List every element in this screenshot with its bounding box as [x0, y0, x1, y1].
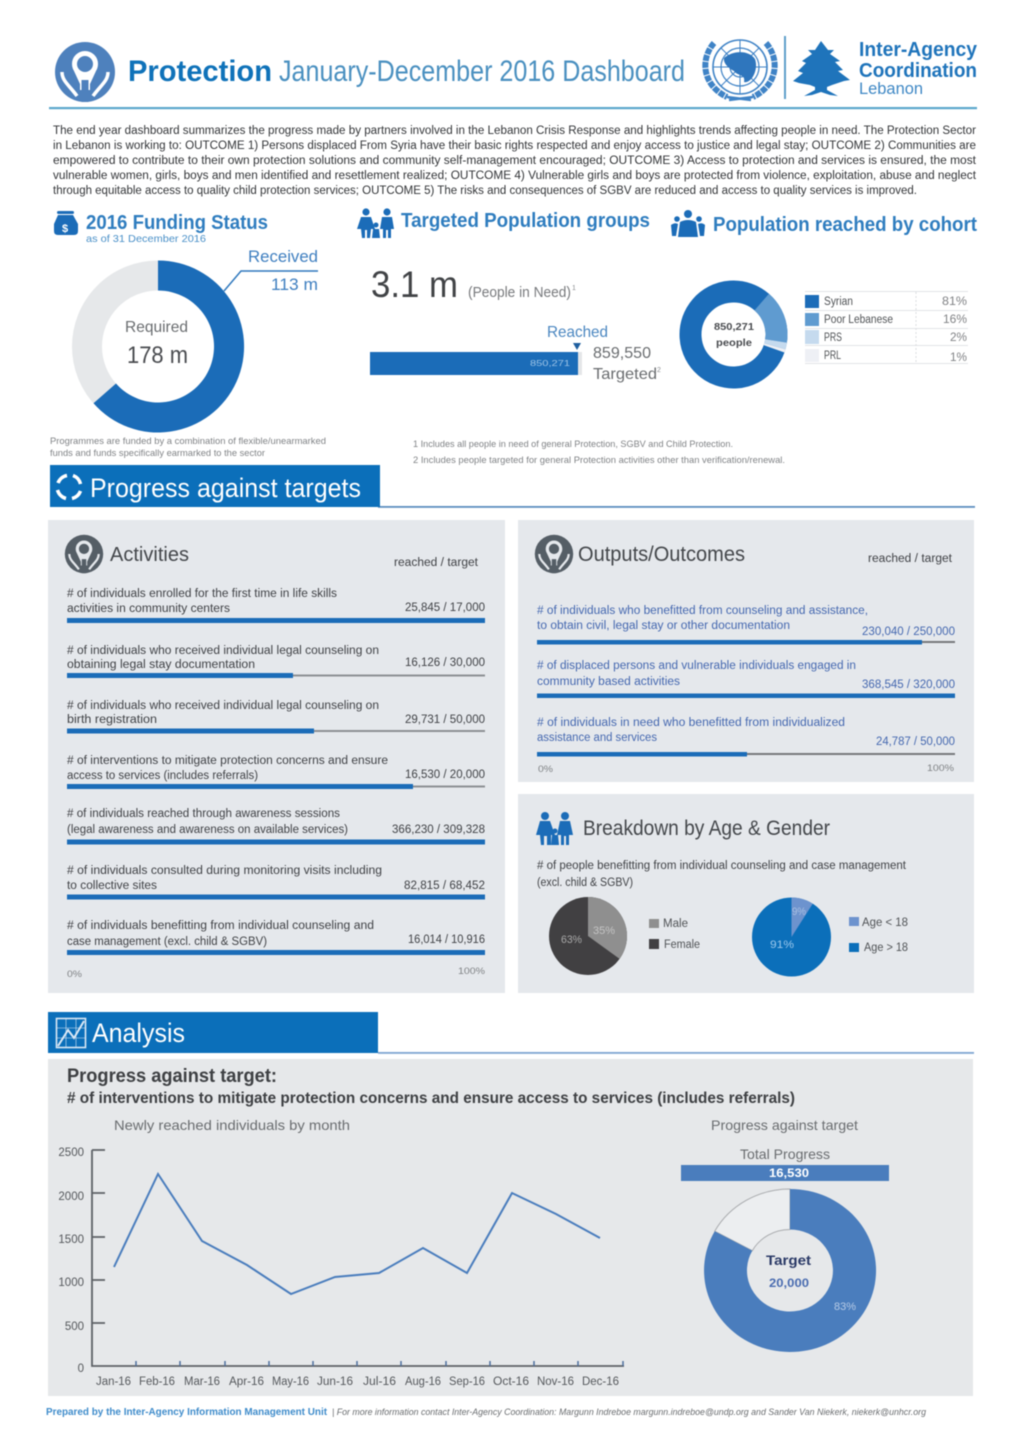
icon: family	[357, 208, 394, 238]
icon: UN emblem	[705, 40, 775, 100]
outcome row 1: to obtain civil, legal stay or other documentation	[537, 620, 790, 632]
donut centre label: 850,271	[714, 322, 754, 333]
activity row 3	[67, 700, 485, 734]
scale labels	[538, 763, 955, 775]
legend: age: Age > 18	[864, 942, 908, 954]
activity row 6: 82,815 / 68,452	[404, 880, 485, 892]
activity row 5	[67, 808, 485, 844]
line chart: newly reached individuals by month: Newly reached individuals by month	[114, 1117, 350, 1133]
line chart: newly reached individuals by month: 500	[65, 1321, 84, 1333]
activity row 1	[67, 588, 485, 623]
scale labels: 100%	[458, 966, 486, 977]
outcome row 2: 368,545 / 320,000	[862, 679, 955, 691]
outcome row 1: # of individuals who benefitted from counseling and assistance,	[537, 605, 868, 617]
divider	[784, 36, 786, 99]
bar: reached vs targeted	[370, 324, 661, 383]
outcome row 2	[537, 660, 955, 698]
activity row 2: 16,126 / 30,000	[405, 657, 485, 669]
donut centre label	[714, 322, 754, 349]
logo text: Inter-Agency Coordination Lebanon: Coordination	[859, 60, 977, 82]
heading: progress against target: Progress against target:	[67, 1066, 277, 1087]
donut chart: funding: Required	[125, 319, 188, 336]
funding note	[50, 436, 326, 459]
line chart: newly reached individuals by month: May-16	[272, 1376, 309, 1388]
panel: analysis chart area	[48, 1059, 973, 1396]
scale labels: 100%	[927, 763, 955, 774]
outcome row 3: # of individuals in need who benefitted from individualized	[537, 717, 845, 729]
column label: reached / target	[394, 557, 479, 569]
heading: outputs/outcomes: Outputs/Outcomes	[578, 543, 745, 566]
section banner: analysis: Analysis	[92, 1018, 185, 1048]
chart: total progress donut: 20,000	[769, 1276, 809, 1290]
legend: age: Age < 18	[862, 917, 908, 929]
activity row 3: # of individuals who received individual legal counseling on	[67, 700, 379, 712]
icon: chart	[56, 1018, 86, 1048]
heading: activities: Activities	[110, 544, 189, 566]
header	[55, 36, 978, 102]
logo text: Inter-Agency Coordination Lebanon: Inter-Agency	[859, 39, 978, 61]
heading: targeted population groups: Targeted Population groups	[401, 210, 650, 232]
activity row 2: obtaining legal stay documentation	[67, 659, 255, 671]
panel: targeted population groups	[357, 208, 785, 466]
funding note: Programmes are funded by a combination of flexible/unearmarked	[50, 436, 326, 447]
activity row 1: 25,845 / 17,000	[405, 602, 485, 614]
line chart: newly reached individuals by month: 1500	[58, 1234, 84, 1246]
logo text: Inter-Agency Coordination Lebanon: Lebanon	[859, 79, 923, 98]
activity row 7	[67, 920, 485, 955]
stat: people in need: (People in Need)	[468, 284, 571, 301]
line chart: newly reached individuals by month: 1000	[58, 1277, 84, 1289]
intro paragraph: The end year dashboard summarizes the progress made by partners involved in the Lebanon Crisis Response and highlights trends affecting people in need. The Protection Sector	[53, 125, 976, 137]
chart: total progress donut: 16,530	[769, 1166, 809, 1180]
donut chart: funding: 178 m	[127, 342, 188, 369]
title: January-December 2016 Dashboard	[279, 55, 685, 88]
activity row 6: to collective sites	[67, 880, 157, 892]
footer: Prepared by the Inter-Agency Information Management Unit	[46, 1406, 327, 1418]
stat: people in need: 3.1 m	[371, 264, 458, 305]
heading: progress against target: # of interventions to mitigate protection concerns and ensure access to services (includes referrals)	[67, 1090, 795, 1107]
line chart: newly reached individuals by month: Jul-16	[363, 1376, 396, 1388]
pie chart: age	[752, 898, 831, 976]
activity row 4	[67, 755, 485, 789]
line chart: newly reached individuals by month: Mar-16	[184, 1376, 220, 1388]
chart: total progress donut: Target	[766, 1252, 811, 1268]
panel: outputs/outcomes	[518, 520, 974, 782]
bar: reached vs targeted: 2	[657, 367, 661, 374]
title: Protection	[128, 55, 272, 88]
scale labels: 0%	[67, 969, 83, 980]
activity row 4: access to services (includes referrals)	[67, 770, 258, 782]
column label: reached / target	[868, 553, 953, 565]
legend table: cohort: Poor Lebanese	[824, 314, 893, 326]
subheading: (excl. child & SGBV)	[537, 877, 633, 889]
callout: received: 113 m	[271, 275, 318, 294]
footer	[46, 1406, 926, 1418]
intro paragraph: in Lebanon is working to: OUTCOME 1) Persons displaced From Syria have their basic rights respected and enjoy access to justice and legal stay; OUTCOME 2) Communities are	[53, 140, 976, 152]
legend table: cohort	[805, 292, 968, 364]
donut centre label: people	[716, 338, 752, 349]
line chart: newly reached individuals by month: Aug-16	[405, 1376, 441, 1388]
outcome row 1: 230,040 / 250,000	[862, 626, 955, 638]
outcome row 2: community based activities	[537, 676, 680, 688]
bar: reached vs targeted: Reached	[547, 324, 608, 341]
legend table: cohort: PRL	[824, 350, 841, 362]
stat: people in need	[371, 264, 576, 305]
line chart: newly reached individuals by month: 2000	[58, 1191, 84, 1203]
line chart: newly reached individuals by month: Dec-16	[582, 1376, 619, 1388]
scale labels	[67, 966, 486, 980]
intro paragraph: through equitable access to quality child protection services; OUTCOME 5) The risks and consequences of SGBV are reduced and access to quality services is improved.	[53, 185, 917, 197]
subheading	[537, 860, 907, 889]
callout: received	[224, 247, 318, 294]
stat: people in need: 1	[572, 285, 576, 292]
activity row 6: # of individuals consulted during monitoring visits including	[67, 865, 382, 877]
callout: received: Received	[248, 247, 318, 266]
activity row 7: 16,014 / 10,916	[408, 934, 485, 946]
line chart: newly reached individuals by month: 2500	[58, 1147, 84, 1159]
subheading: # of people benefitting from individual counseling and case management	[537, 860, 907, 872]
activity row 7: # of individuals benefitting from individual counseling and	[67, 920, 374, 932]
donut chart: cohort	[673, 274, 794, 395]
line chart: newly reached individuals by month: Sep-16	[449, 1376, 485, 1388]
pie chart: gender	[549, 897, 627, 975]
activity row 2: # of individuals who received individual legal counseling on	[67, 645, 379, 657]
outcome row 3: 24,787 / 50,000	[876, 736, 955, 748]
pie chart: gender: 35%	[593, 925, 615, 937]
funding note: funds and funds specifically earmarked to the sector	[50, 448, 265, 459]
legend table: cohort: Syrian	[824, 296, 853, 308]
activity row 4: 16,530 / 20,000	[405, 769, 485, 781]
line chart: newly reached individuals by month: Feb-16	[139, 1376, 175, 1388]
icon: cohort	[671, 210, 705, 237]
line chart: newly reached individuals by month: 0	[78, 1363, 84, 1375]
chart: total progress donut: Total Progress	[740, 1146, 830, 1162]
heading: breakdown: Breakdown by Age & Gender	[583, 817, 830, 840]
pie chart: age: 91%	[770, 939, 794, 951]
panel: population reached by cohort	[671, 210, 977, 395]
icon: money bag: $	[62, 223, 68, 235]
activity row 3: 29,731 / 50,000	[405, 714, 485, 726]
intro paragraph	[53, 125, 977, 197]
activity row 3: birth registration	[67, 714, 157, 726]
legend table: cohort: 2%	[950, 332, 967, 344]
section banner: analysis	[48, 1012, 974, 1054]
bar: reached vs targeted: 850,271	[530, 359, 571, 368]
icon: circular arrows	[58, 476, 80, 498]
line chart: newly reached individuals by month	[58, 1117, 624, 1388]
activity row 5: # of individuals reached through awareness sessions	[67, 808, 340, 820]
heading: progress against target	[67, 1066, 795, 1107]
bar: reached vs targeted: 859,550	[593, 345, 651, 362]
activity row 1: # of individuals enrolled for the first time in life skills	[67, 588, 337, 600]
icon: family	[536, 812, 573, 845]
activity row 1: activities in community centers	[67, 603, 230, 615]
chart: total progress donut: Progress against target	[711, 1117, 858, 1133]
activity row 6	[67, 865, 485, 900]
heading: 2016 funding status: 2016 Funding Status	[86, 212, 268, 234]
legend: age	[849, 917, 908, 954]
legend: gender: Female	[664, 939, 700, 951]
activity row 2	[67, 645, 485, 678]
line chart: newly reached individuals by month: Oct-16	[493, 1376, 529, 1388]
outcome row 2: # of displaced persons and vulnerable individuals engaged in	[537, 660, 856, 672]
legend: gender	[649, 918, 700, 951]
heading: population reached by cohort: Population reached by cohort	[713, 214, 977, 236]
pie chart: age: 9%	[792, 906, 806, 918]
panel: funding status	[50, 211, 326, 459]
chart: total progress donut: 83%	[834, 1301, 856, 1313]
line chart: newly reached individuals by month: Jun-16	[317, 1376, 353, 1388]
legend table: cohort: PRS	[824, 332, 842, 344]
legend: gender: Male	[663, 918, 688, 930]
activity row 7: case management (excl. child & SGBV)	[67, 936, 267, 948]
footnotes: 2 Includes people targeted for general Protection activities other than verification/renewal.	[413, 455, 785, 466]
activity row 5: (legal awareness and awareness on available services)	[67, 824, 348, 836]
icon: money bag	[54, 211, 78, 235]
icon: protection grey	[65, 535, 103, 573]
line chart: newly reached individuals by month: Apr-16	[229, 1376, 264, 1388]
date note: as of 31 December 2016	[86, 233, 206, 245]
icon: protection logo	[55, 42, 115, 102]
logo text: Inter-Agency Coordination Lebanon	[859, 39, 978, 98]
outcome row 1	[537, 605, 955, 644]
footnotes: 1 Includes all people in need of general Protection, SGBV and Child Protection.	[413, 439, 733, 450]
line chart: newly reached individuals by month: Jan-16	[96, 1376, 131, 1388]
title	[128, 55, 685, 88]
section banner: progress against targets	[50, 465, 975, 508]
donut chart: funding	[87, 260, 244, 432]
footer: | For more information contact Inter-Agency Coordination: Margunn Indreboe margunn.indreboe@undp.org and Sander Van Niekerk, niekerk@unhcr.org	[332, 1407, 926, 1417]
icon: cedar tree	[793, 41, 850, 96]
icon: protection grey	[535, 535, 573, 573]
line chart: newly reached individuals by month: Nov-16	[537, 1376, 574, 1388]
legend table: cohort: 81%	[942, 296, 967, 308]
scale labels: 0%	[538, 764, 554, 775]
chart: total progress donut	[681, 1117, 889, 1352]
intro paragraph: vulnerable women, girls, boys and men identified and resettlement realized; OUTCOME 4) Vulnerable girls and boys are protected from violence, exploitation, abuse and neglect	[53, 170, 977, 182]
activity row 5: 366,230 / 309,328	[392, 824, 485, 836]
panel: breakdown by age and gender	[518, 794, 974, 993]
bar: reached vs targeted: Targeted	[593, 366, 657, 383]
legend table: cohort: 1%	[950, 352, 967, 364]
outcome row 3	[537, 717, 955, 756]
outcome row 3: assistance and services	[537, 732, 657, 744]
section banner: progress against targets: Progress against targets	[90, 473, 361, 503]
footnotes	[413, 439, 785, 466]
legend table: cohort: 16%	[943, 314, 967, 326]
panel: activities	[48, 520, 505, 993]
activity row 4: # of interventions to mitigate protection concerns and ensure	[67, 755, 388, 767]
intro paragraph: empowered to contribute to their own protection solutions and community self-management encouraged; OUTCOME 3) Access to protection and services is ensured, the most	[53, 155, 977, 167]
pie chart: gender: 63%	[561, 934, 582, 946]
